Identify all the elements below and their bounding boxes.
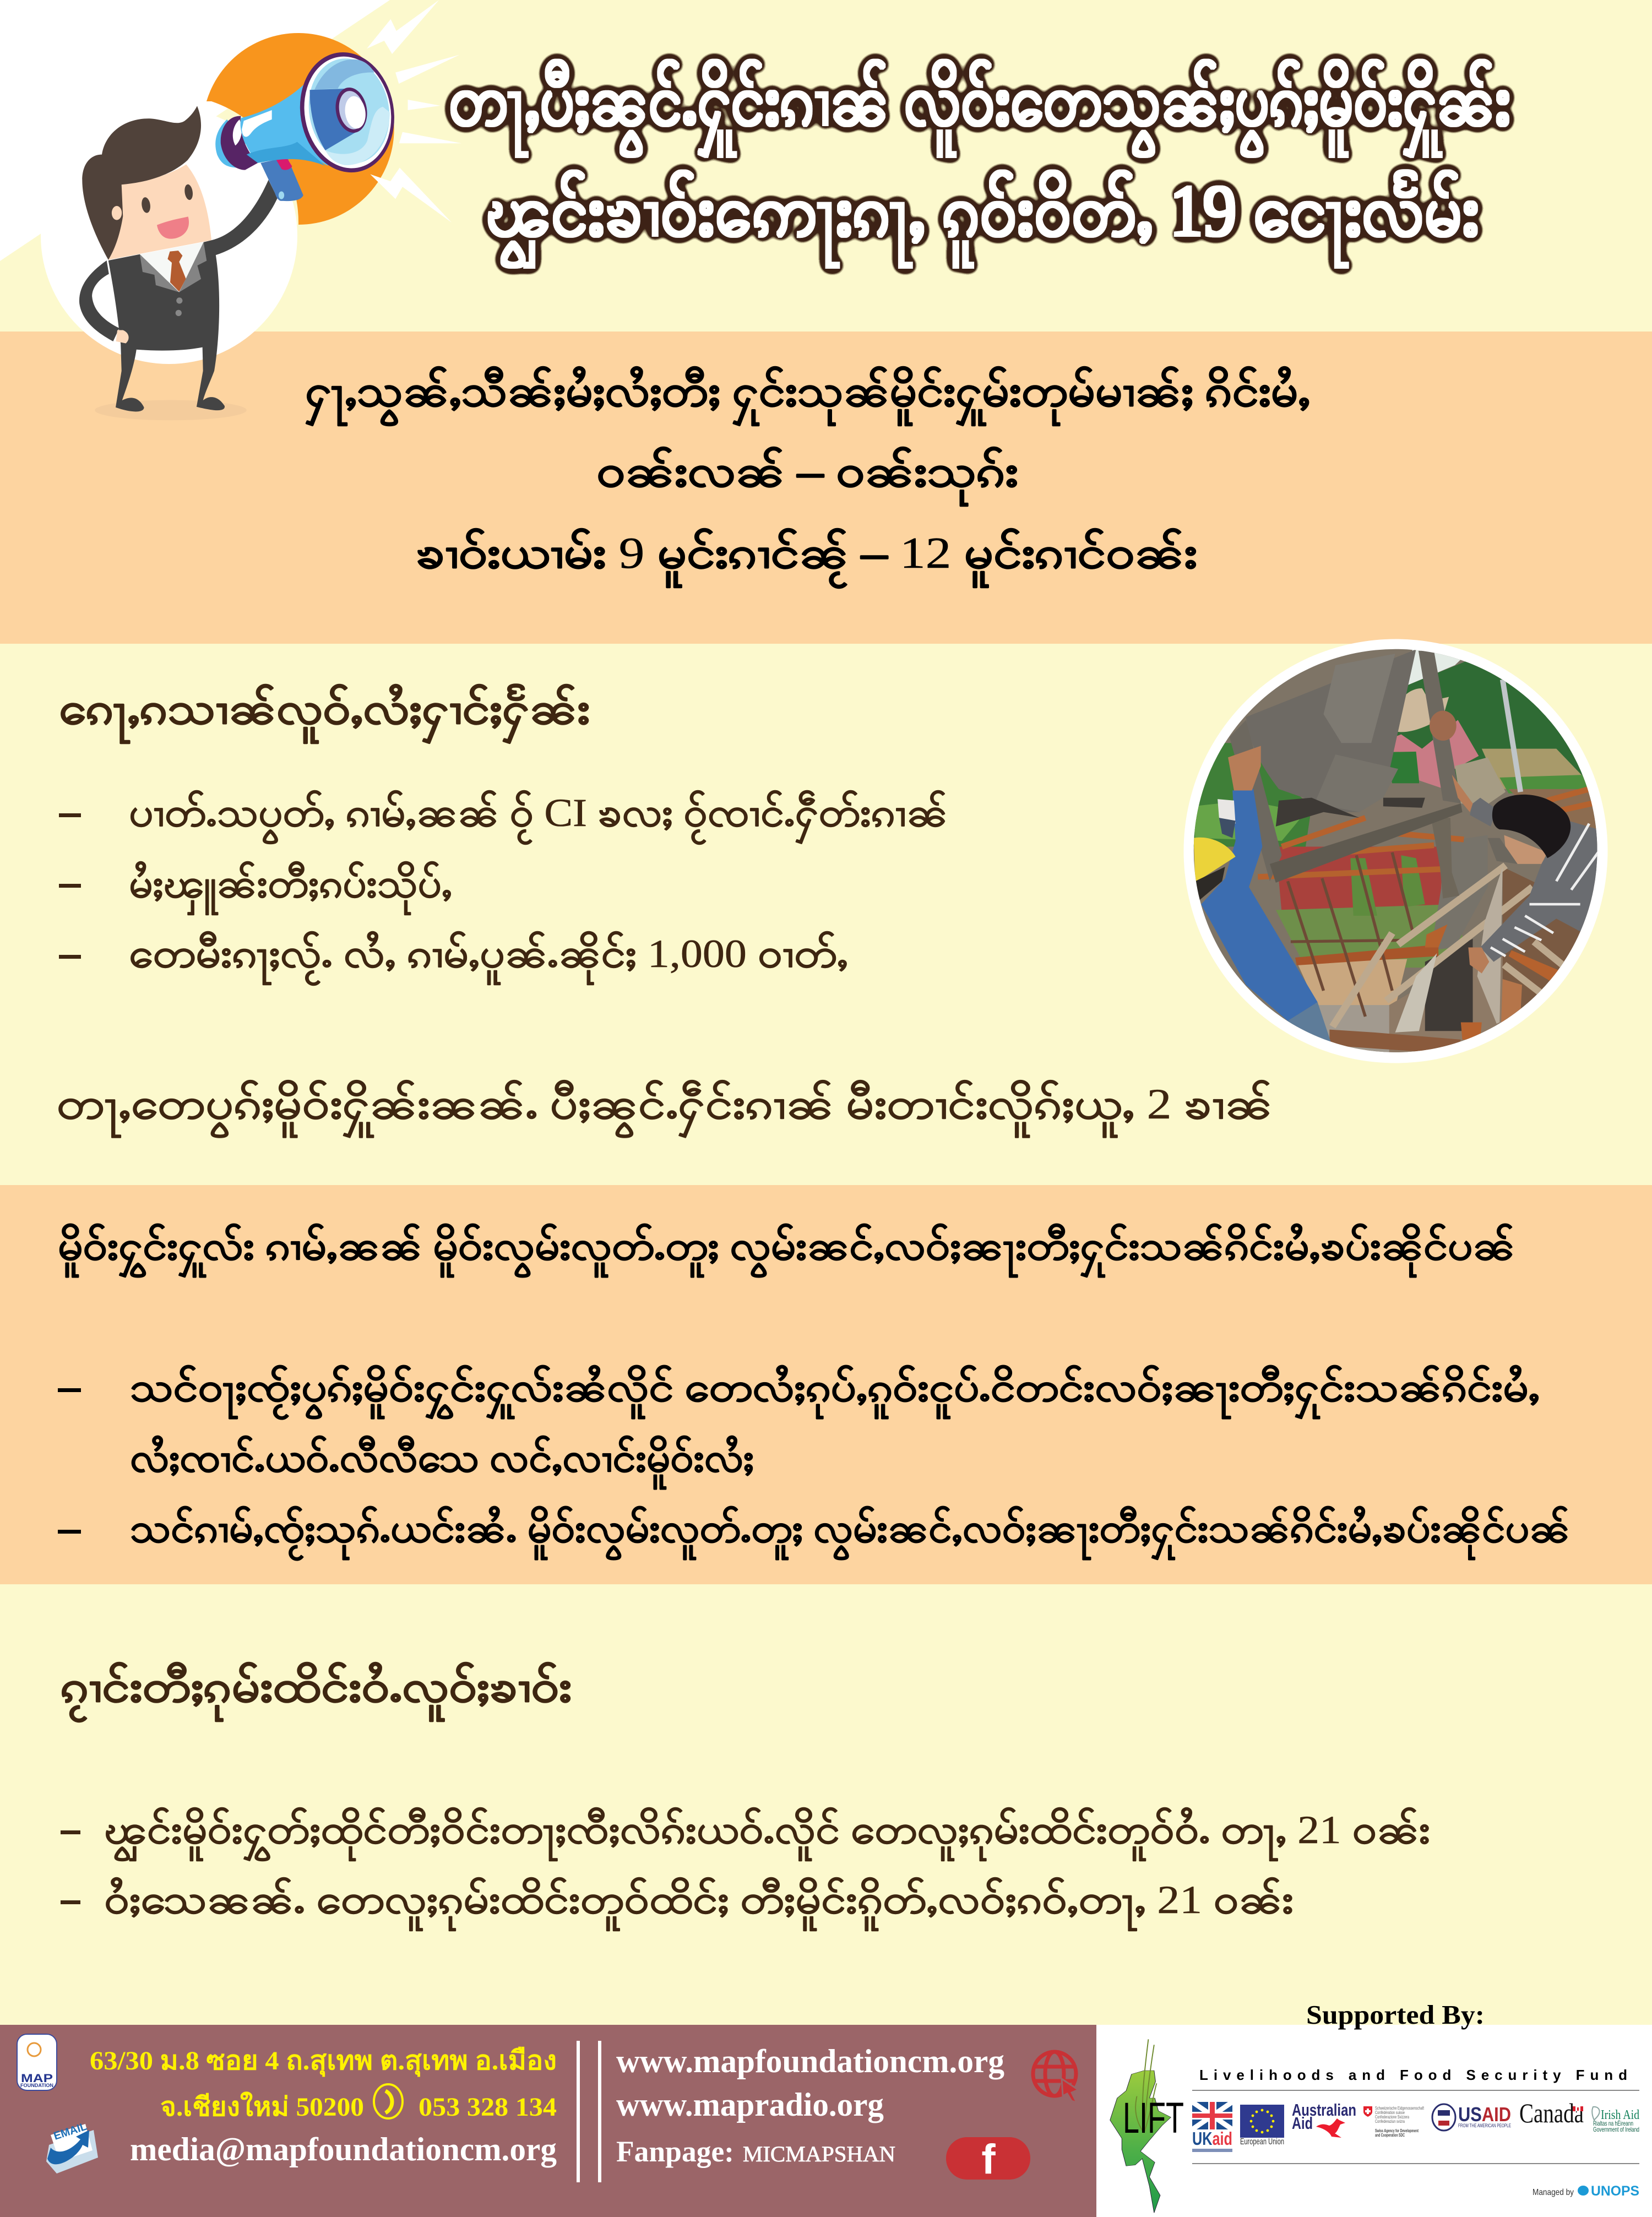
fund name: Livelihoods and Food Security Fund [1199,2067,1627,2083]
website link 2: www.mapradio.org [616,2086,884,2123]
logo: Managed by UNOPS: UNOPS [1591,2183,1639,2199]
panel: orange schedule band [0,332,1652,644]
logo: Swiss Agency: Confederazione Svizzera [1375,2115,1409,2120]
fanpage name: MICMAPSHAN [743,2142,895,2166]
quarantine item 1: ၾွင်းမိူဝ်းႁွတ်ႈထိုင်တီႈဝိင်းတႃႈၸီႈလိၵ်းယဝ်ႉလိူင် တေလူႈၵုမ်းထိင်းတူဝ်ဝႆႉ တႃႇ 21 ဝၼ်း [104,1808,1430,1861]
instruction 1 [58,1366,1540,1488]
logo: Swiss Agency: and Cooperation SDC [1375,2133,1405,2138]
photo: construction workers [1184,639,1608,1063]
icon: globe with cursor [1033,2052,1078,2102]
phone number: 053 328 134 [419,2093,557,2122]
address line 2: จ.เชียงใหม่ 50200 [160,2091,364,2122]
email address: media@mapfoundationcm.org [130,2131,557,2167]
logo: Managed by UNOPS [1533,2183,1639,2199]
logo: UK aid [1192,2102,1232,2152]
schedule: days line: ဝၼ်းလၼ် – ဝၼ်းသုၵ်း [596,447,1018,506]
icon: MAP Foundation logo: FOUNDATION [20,2083,53,2088]
logo: European Union [1240,2105,1284,2147]
schedule: venue line: ႁႃႇသွၼ်ႇသီၼ်ႈမႆႈလႆႈတီႈ ႁုင်းသုၼ်မိူင်းႁူမ်းတုမ်မၢၼ်ႈ ၵိင်းမႆႇ [305,367,1310,426]
website link 1: www.mapfoundationcm.org [616,2043,1004,2079]
icon: LIFT logo map of Myanmar: LIFT [1123,2093,1184,2142]
logo: Swiss Agency: Swiss Agency for Development [1375,2128,1419,2133]
footer: sponsor panel [1096,1999,1652,2217]
logo: Australian Aid: Aid [1292,2113,1313,2133]
list item 2: မႆႈၾူၼ်းတီႈၵပ်းသိုပ်ႇ [129,862,452,914]
logo: Irish Aid [1592,2107,1639,2133]
title line 2: ၾွင်းၶၢဝ်းဢေႃးၵႃႇ ၵူဝ်းဝိတ်ႇ 19 ငေႃးလႅမ်း [486,170,1479,267]
logo: Swiss Agency: Schweizerische Eidgenossenschaft [1375,2106,1425,2111]
text: self-quarantine option intro: မိူဝ်းႁွင်းႁူလ်း ၵၢမ်ႇၼၼ် မိူဝ်းလွမ်းလူတ်ႉတူႈ လွမ်းၼင်ႇလဝ်ႈၼႃးတီႈႁုင်းသၼ်ၵိင်းမႆႇၶပ်းၼိုင်ပၼ် [58,1224,1515,1277]
fanpage label: Fanpage: [616,2135,734,2168]
logo: Australian Aid: Australian [1292,2100,1356,2120]
list item 2 [59,862,452,914]
logo: Swiss Agency: Confederaziun svizra [1375,2119,1405,2124]
icon: LIFT logo map of Myanmar [1110,2039,1184,2213]
instruction 1: လႆႈၸၢင်ႉယဝ်ႉလီလီသေ လင်ႇလၢင်းမိူဝ်းလႆႈ [130,1436,754,1488]
illustration: man with megaphone [41,0,461,420]
logo: Managed by UNOPS: Managed by [1533,2188,1574,2197]
logo: Irish Aid: Rialtas na hÉireann [1593,2119,1633,2127]
icon: facebook [946,2136,1030,2183]
logo: UK aid: UKaid [1192,2128,1232,2149]
quarantine list [61,1808,1430,1930]
rule lines [1192,2090,1639,2164]
icon: email envelope: EMAIL [52,2121,89,2143]
logo: USAID [1432,2103,1511,2131]
logo: Australian Aid [1292,2100,1356,2138]
address line 1: 63/30 ม.8 ซอย 4 ถ.สุเทพ ต.สุเทพ อ.เมือง [90,2046,557,2077]
icon: MAP Foundation logo: MAP [21,2072,53,2085]
panel: orange instruction band [0,1185,1652,1584]
list item 3: တေမီးၵႃႈလႂ်ႉ လႆႇ ၵၢမ်ႇပူၼ်ႉၼိုင်ႈ 1,000 ဝၢတ်ႇ [129,932,848,985]
footer: contact panel [0,2025,1096,2217]
icon: MAP Foundation logo [17,2034,57,2090]
instruction list [58,1366,1570,1559]
icon: facebook: f [981,2136,996,2183]
instruction 1: သင်ဝႃႈၸႂ်ႈပွၵ်ႈမိူဝ်းႁွင်းႁူလ်းၼႆလိူင် တေလႆႈၵုပ်ႇၵူဝ်းငူပ်ႉငိတင်းလဝ်ႈၼႃးတီႈႁုင်းသၼ်ၵိင်းမႆႇ [130,1366,1540,1419]
heading: quarantine period: ၵႂၢင်းတီႈၵုမ်းထိင်းဝႆႉလူဝ်ႈၶၢဝ်း [61,1662,572,1722]
instruction 2: သင်ၵၢမ်ႇၸႂ်ႈသုၵ်ႉယင်းၼႆႉ မိူဝ်းလွမ်းလူတ်ႉတူႈ လွမ်းၼင်ႇလဝ်ႈၼႃးတီႈႁုင်းသၼ်ၵိင်းမႆႇၶပ်းၼိုင်ပၼ် [130,1507,1570,1559]
logo: Irish Aid: Irish Aid [1601,2108,1639,2122]
icon: email envelope [46,2121,98,2173]
supporter title: Supported By: [1306,1999,1485,2030]
logo: USAID: FROM THE AMERICAN PEOPLE [1458,2123,1511,2129]
quarantine item 2: ဝႆႈသေၼၼ်ႉ တေလူႈၵုမ်းထိင်းတူဝ်ထိင်ႈ တီႈမိူင်းၵိူတ်ႇလဝ်ႈၵဝ်ႇတႃႇ 21 ဝၼ်း [104,1878,1294,1930]
icon: phone [374,2084,403,2118]
logo: Swiss Agency: Confédération suisse [1375,2110,1405,2115]
text: two options to return: တႃႇတေပွၵ်ႈမိူဝ်းႁိူၼ်းၼၼ်ႉ ပီႈၼွင်ႉႁဵင်းၵၢၼ် မီးတၢင်းလိူၵ်ႈယူႇ 2 ၶၢၼ် [57,1080,1273,1138]
logo: USAID: USAID [1458,2103,1511,2126]
logo: European Union: European Union [1240,2137,1284,2147]
header white diagonal shape [0,0,390,261]
list item 1: ပၢတ်ႉသပွတ်ႇ ၵၢမ်ႇၼၼ် ဝႂ် CI ၶလႈ ဝႂ်ၸၢင်ႉႁဵတ်းၵၢၼ် [129,791,948,844]
logo: Swiss Agency [1363,2106,1425,2138]
logo: Canada: Canada [1519,2098,1584,2128]
divider lines [577,2041,601,2182]
document list [59,791,948,985]
heading: documents required: ၵေႃႇၵသၢၼ်လူဝ်ႇလႆႈႁၢင်ႈႁႅၼ်း [59,684,590,743]
schedule: hours line: ၶၢဝ်းယၢမ်း 9 မူင်းၵၢင်ၼႂ် – 12 မူင်းၵၢင်ဝၼ်း [416,529,1197,588]
